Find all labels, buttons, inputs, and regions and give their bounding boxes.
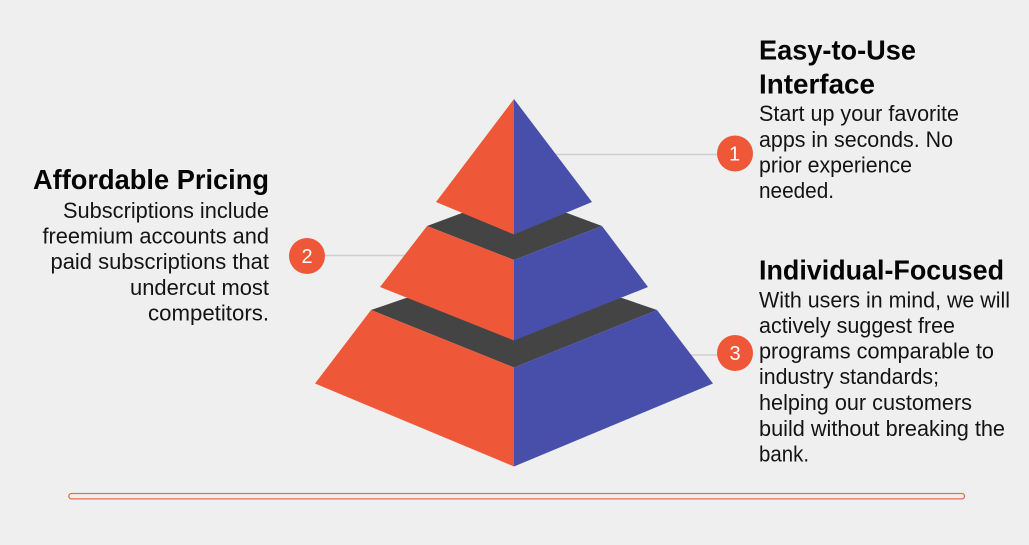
heading: Easy-to-Use Interface: [759, 34, 916, 100]
pyramid: [315, 99, 713, 466]
heading: Easy-to-Use Interface: Interface: [759, 68, 875, 100]
body: Individual-Focused: [759, 288, 1010, 466]
heading: Affordable Pricing: Affordable Pricing: [33, 164, 269, 195]
body: Affordable Pricing: [42, 198, 269, 326]
body: Easy-to-Use Interface: apps in seconds. No: [759, 127, 953, 152]
connector line: item 1: [550, 154, 722, 156]
number badge 1: 1: [729, 144, 740, 166]
number badge 2: 2: [301, 246, 313, 268]
body: Easy-to-Use Interface: Start up your favorite: [759, 101, 959, 126]
body: Easy-to-Use Interface: needed.: [759, 178, 834, 203]
connector line: item 2: [322, 254, 410, 256]
text block: Easy-to-Use Interface: [759, 34, 959, 203]
pyramid gap shadow: lower: [371, 298, 657, 368]
body: Affordable Pricing: freemium accounts and: [42, 224, 269, 248]
body: Individual-Focused: bank.: [759, 442, 809, 466]
pyramid gap shadow: upper: [427, 213, 602, 260]
body: Individual-Focused: With users in mind, we will: [759, 288, 1010, 312]
body: Affordable Pricing: Subscriptions include: [63, 198, 269, 223]
body: Easy-to-Use Interface: prior experience: [759, 152, 912, 178]
number badge 3: 3: [729, 343, 741, 365]
pyramid top tier: [436, 99, 592, 234]
body: Affordable Pricing: undercut most: [130, 275, 269, 300]
body: Individual-Focused: actively suggest free: [759, 313, 955, 338]
connector line: item 3: [685, 354, 722, 356]
body: Easy-to-Use Interface: [759, 101, 959, 203]
text block: Individual-Focused: [759, 254, 1010, 466]
body: Affordable Pricing: paid subscriptions that: [50, 249, 269, 274]
number badge 1: [717, 136, 753, 172]
body: Individual-Focused: programs comparable to: [759, 338, 994, 364]
text block: Affordable Pricing: [33, 164, 269, 326]
number badge 3: [717, 335, 753, 371]
pyramid bottom tier: [315, 310, 713, 466]
body: Individual-Focused: industry standards;: [759, 364, 939, 389]
body: Individual-Focused: build without breaking the: [759, 416, 1005, 441]
pyramid middle tier: [380, 226, 648, 340]
body: Individual-Focused: helping our customers: [759, 390, 972, 415]
baseline bar: [69, 494, 965, 499]
heading: Easy-to-Use Interface: Easy-to-Use: [759, 34, 916, 66]
number badge 2: [289, 238, 325, 274]
body: Affordable Pricing: competitors.: [148, 300, 269, 326]
heading: Individual-Focused: Individual-Focused: [759, 254, 1004, 286]
